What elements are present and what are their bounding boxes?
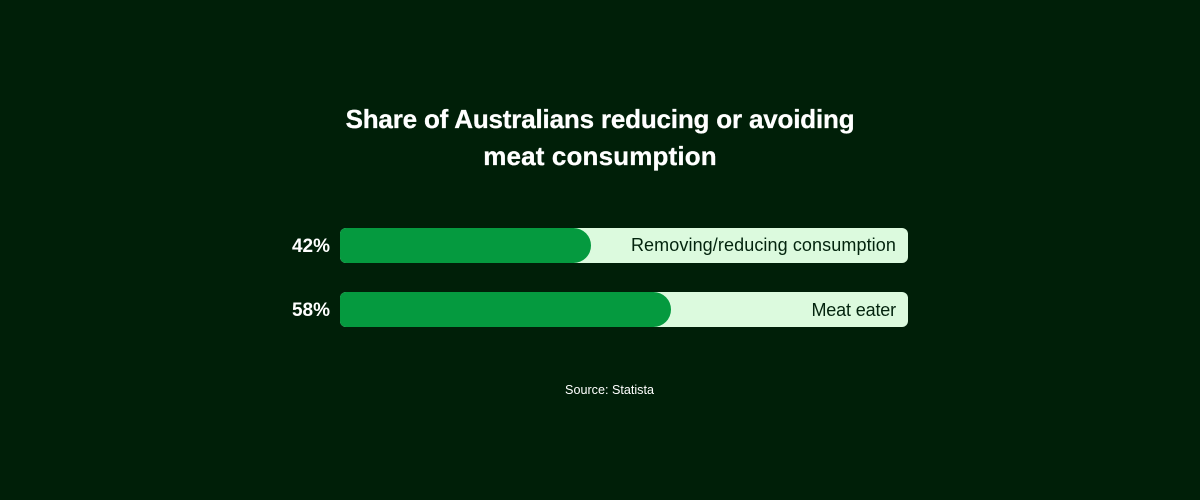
bar: removing/reducing consumption — [340, 228, 908, 263]
source note: Source: Statista — [565, 383, 654, 397]
bar chart — [292, 228, 908, 327]
title — [346, 104, 854, 171]
bar fill: 58% — [340, 292, 671, 327]
title: Share of Australians reducing or avoiding — [346, 104, 854, 134]
title: meat consumption — [483, 141, 717, 171]
value label: 42%: 42% — [292, 236, 330, 257]
bar: meat eater — [340, 292, 908, 327]
bar label: meat eater: Meat eater — [811, 300, 896, 320]
bar fill: 42% — [340, 228, 591, 263]
bar label: removing/reducing consumption: Removing/reducing consumption — [631, 235, 896, 255]
value label: 58%: 58% — [292, 300, 330, 321]
